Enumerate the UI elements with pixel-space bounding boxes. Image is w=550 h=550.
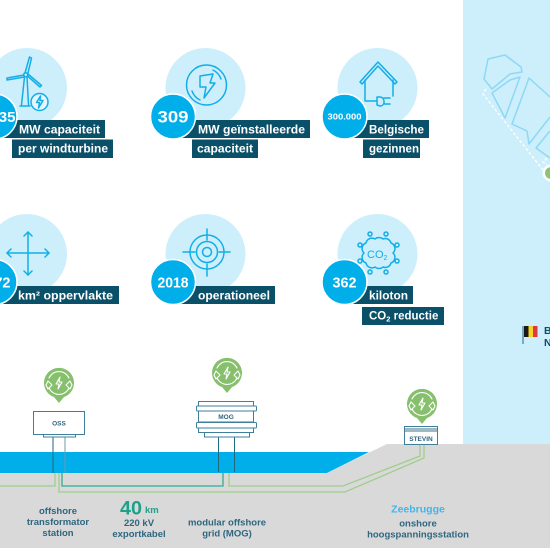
panel: operational year bbox=[150, 214, 275, 304]
sea bbox=[0, 452, 369, 473]
caption: 40 km 220 kV exportkabel: km bbox=[145, 505, 159, 516]
icon: wind turbine bbox=[7, 57, 48, 110]
caption: offshore transformator station: station bbox=[42, 528, 74, 539]
panel: CO2 reduction bbox=[322, 214, 444, 325]
icon: green pin STEVIN bbox=[407, 389, 437, 424]
label: MW capaciteit per windturbine: MW capaciteit bbox=[19, 124, 100, 136]
number badge: 7,35 bbox=[0, 94, 17, 139]
label: km2 oppervlakte bbox=[0, 286, 119, 304]
number badge: 72 bbox=[0, 260, 17, 304]
caption: 40 km 220 kV exportkabel: 40 bbox=[120, 498, 142, 520]
caption: offshore transformator station: transformator bbox=[27, 517, 89, 528]
platform: MOG bbox=[196, 402, 256, 472]
label: MW capaciteit per windturbine: per windturbine bbox=[18, 144, 108, 156]
icon: four-way arrows bbox=[7, 232, 49, 275]
caption: Zeebrugge onshore hoogspanningsstation bbox=[367, 504, 469, 540]
station: STEVIN: STEVIN bbox=[409, 436, 433, 443]
panel: map of the Belgian North Sea bbox=[463, 0, 550, 446]
caption: 40 km 220 kV exportkabel: 220 kV bbox=[124, 518, 155, 529]
caption: 40 km 220 kV exportkabel: exportkabel bbox=[112, 529, 166, 540]
number badge: 300.000: 300.000 bbox=[328, 112, 362, 122]
icon text: CO2: CO bbox=[367, 249, 384, 261]
panel: capacity per wind turbine bbox=[0, 48, 113, 158]
icon: house with plug bbox=[360, 62, 397, 106]
diagram: cables bbox=[0, 444, 424, 492]
icon text: CO2: 2 bbox=[384, 255, 388, 262]
caption: Zeebrugge onshore hoogspanningsstation: onshore bbox=[399, 518, 437, 530]
label: kiloton CO2 reductie: 2 bbox=[386, 314, 390, 324]
icon: green pin MOG bbox=[212, 358, 242, 393]
map: location marker bbox=[542, 164, 550, 182]
station: STEVIN bbox=[404, 426, 438, 444]
label: MW capaciteit per windturbine bbox=[0, 120, 113, 158]
label: kiloton CO2 reductie: reductie bbox=[390, 310, 438, 322]
icon: CO2 cloud bbox=[358, 232, 399, 274]
label: Belgische gezinnen bbox=[350, 120, 429, 158]
panel: Belgian households bbox=[322, 48, 429, 158]
label: MW geinstalleerde capaciteit: MW geïnstalleerde bbox=[198, 124, 305, 136]
label: MW geinstalleerde capaciteit: capaciteit bbox=[197, 144, 253, 156]
map: wind farm zone outlines bbox=[484, 55, 550, 158]
caption: Zeebrugge onshore hoogspanningsstation: Zeebrugge bbox=[391, 504, 445, 516]
label: operationeel: operationeel bbox=[198, 290, 270, 302]
icon: green pin OSS bbox=[44, 368, 74, 403]
caption: modular offshore grid: modular offshore bbox=[188, 518, 266, 528]
caption: offshore transformator station: offshore bbox=[39, 506, 77, 517]
number badge: 309 bbox=[150, 94, 196, 139]
label: Belgische gezinnen: gezinnen bbox=[369, 144, 419, 156]
number badge: 362: 362 bbox=[332, 274, 356, 292]
icon: target bbox=[183, 229, 230, 276]
caption: modular offshore grid: grid (MOG) bbox=[202, 528, 252, 540]
number badge: 2018: 2018 bbox=[158, 274, 188, 292]
platform: MOG: MOG bbox=[218, 414, 234, 421]
label: kiloton CO2 reductie: kiloton bbox=[369, 290, 408, 302]
label: kiloton CO2 reductie: CO bbox=[369, 310, 386, 322]
map: dashed cable route bbox=[483, 89, 547, 170]
platform: OSS: OSS bbox=[52, 420, 67, 428]
number badge: 309: 309 bbox=[158, 108, 188, 126]
ground bbox=[0, 444, 550, 548]
label: km2 oppervlakte: km² oppervlakte bbox=[18, 290, 113, 302]
label: MW geinstalleerde capaciteit bbox=[177, 120, 310, 158]
panel: surface area bbox=[0, 214, 119, 304]
label: Belgische gezinnen: Belgische bbox=[369, 124, 424, 136]
panel: installed capacity bbox=[150, 48, 310, 158]
caption: Zeebrugge onshore hoogspanningsstation: hoogspanningsstation bbox=[367, 530, 469, 540]
icon: Belgian flag bbox=[523, 326, 538, 344]
platform: OSS bbox=[34, 412, 84, 473]
icon: lightning circle bbox=[186, 65, 226, 105]
caption: 40 km 220 kV exportkabel bbox=[112, 498, 166, 540]
label: kiloton CO2 reductie bbox=[350, 286, 444, 325]
